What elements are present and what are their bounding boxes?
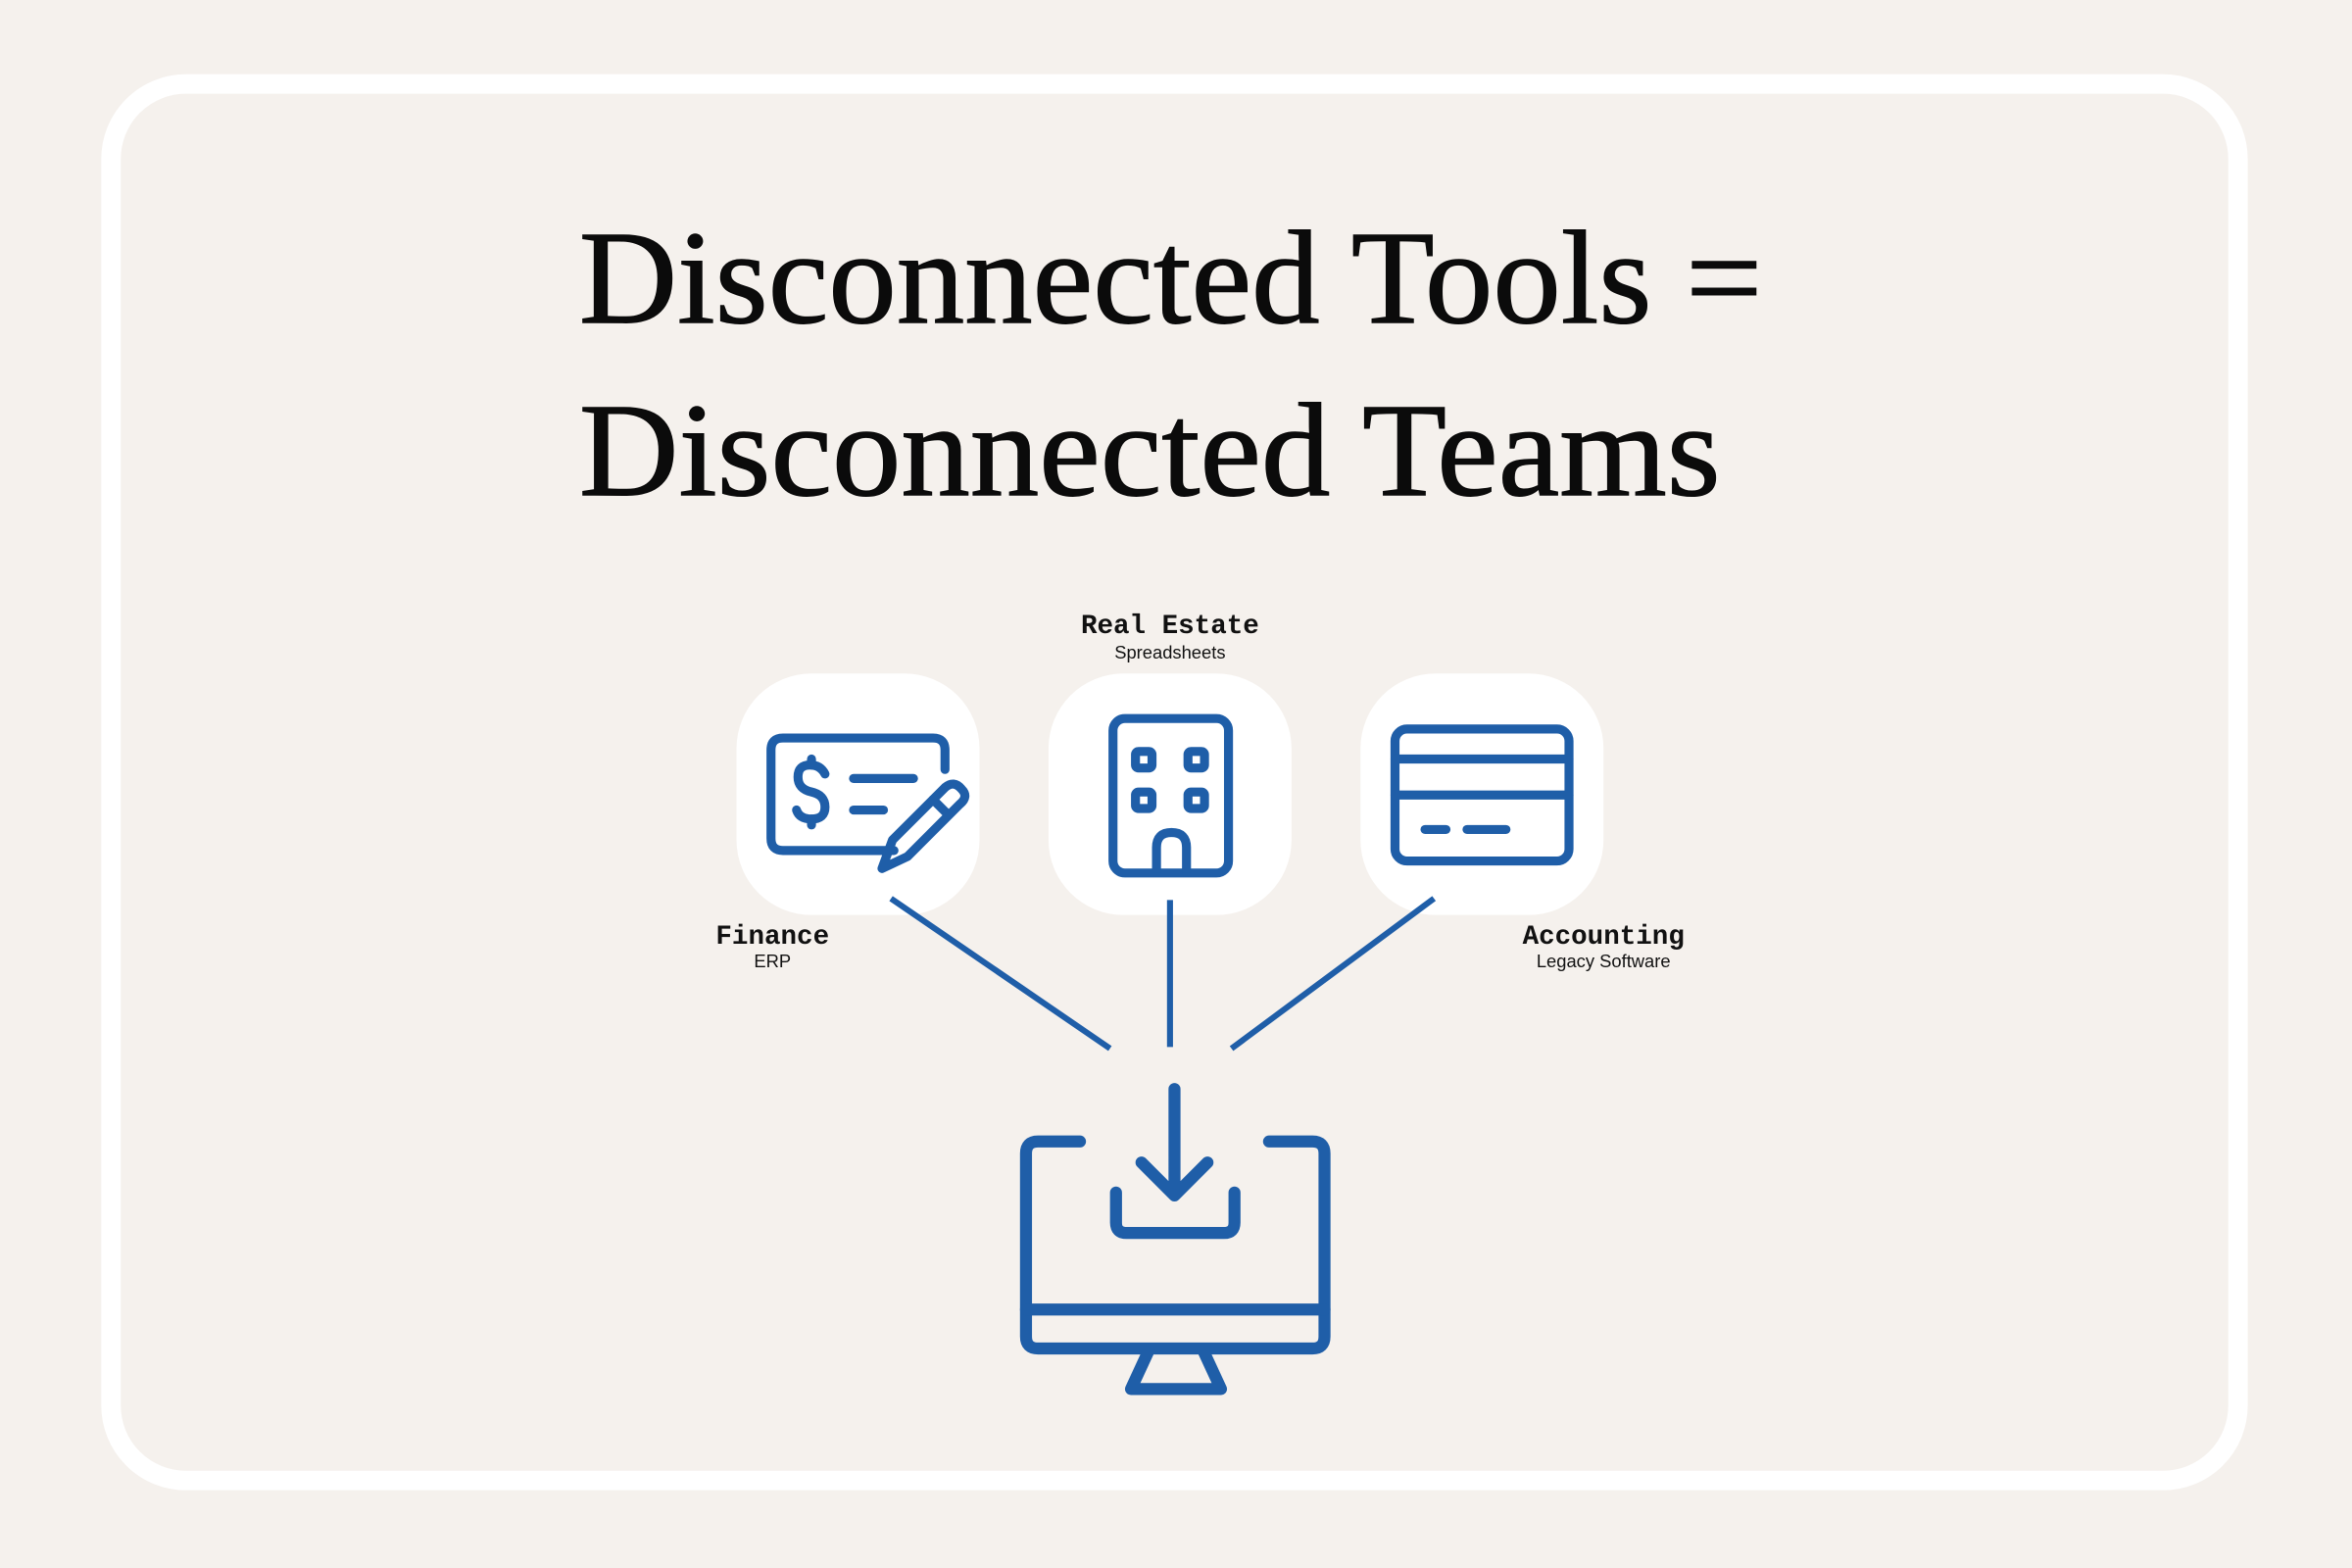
label: finance: ERP	[754, 951, 791, 971]
label: accounting: Legacy Software	[1537, 951, 1671, 971]
title: Disconnected Teams	[579, 377, 1721, 524]
label: accounting	[1523, 922, 1685, 971]
label: finance	[715, 922, 829, 971]
label: real estate	[1081, 612, 1259, 662]
label: real estate: Spreadsheets	[1114, 642, 1226, 662]
title	[579, 205, 1762, 524]
panel: real estate icon	[1049, 673, 1292, 915]
label: finance: Finance	[715, 922, 829, 953]
connector lines	[891, 899, 1434, 1049]
icon: monitor with download	[1026, 1089, 1325, 1389]
panel: finance icon	[737, 673, 979, 915]
title: Disconnected Tools =	[579, 205, 1762, 352]
label: real estate: Real Estate	[1081, 612, 1259, 642]
label: accounting: Accounting	[1523, 922, 1685, 953]
panel: accounting icon	[1360, 673, 1603, 915]
